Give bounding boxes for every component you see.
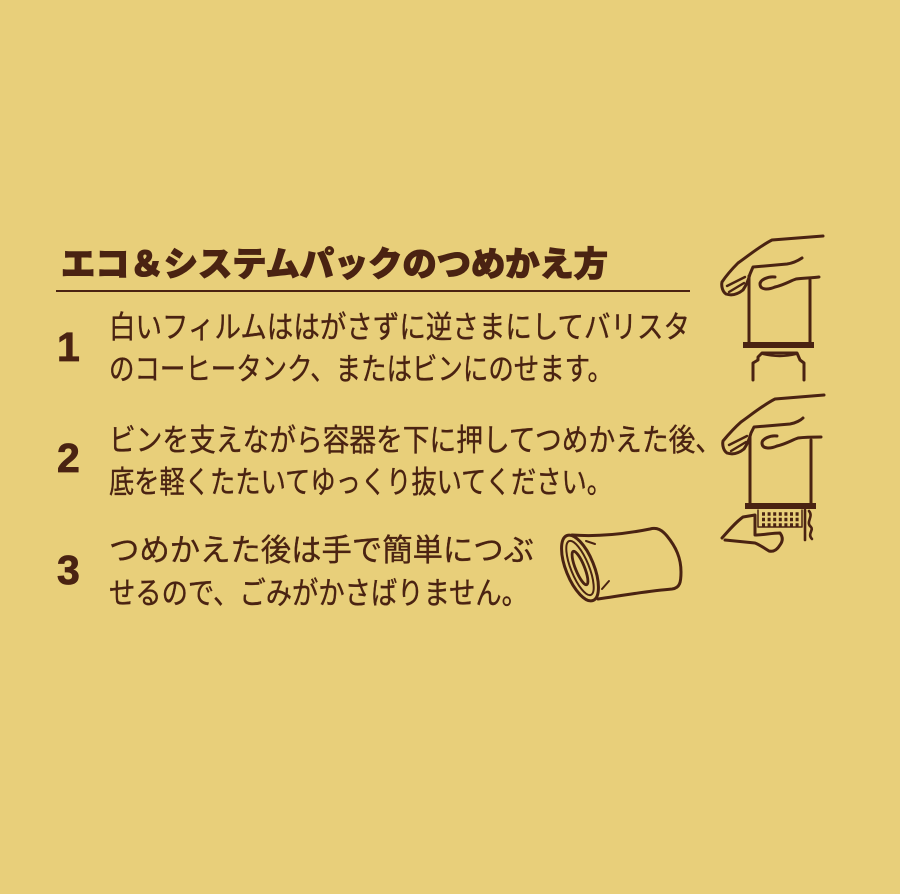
step 2 number: 2	[57, 435, 80, 481]
step 3 text: つめかえた後は手で簡単につぶ	[109, 533, 534, 568]
icon: pressing pack down and tapping	[722, 395, 824, 551]
step 2 text	[109, 423, 722, 500]
step 2 text: ビンを支えながら容器を下に押してつめかえた後、	[109, 423, 722, 458]
step 1 text	[109, 310, 690, 387]
step 2	[57, 423, 722, 500]
step 1 text: 白いフィルムははがさずに逆さまにしてバリスタ	[109, 310, 690, 345]
step 3 number: 3	[57, 547, 80, 593]
icon: flattened empty pack	[554, 528, 681, 606]
step 1 text: のコーヒータンク、またはビンにのせます。	[109, 352, 613, 387]
title rule	[56, 290, 690, 292]
step 3	[57, 533, 534, 611]
title: エコ＆システムパックのつめかえ方	[61, 246, 608, 284]
step 1 number: 1	[57, 324, 80, 370]
step 3 text: せるので、ごみがかさばりません。	[109, 576, 528, 611]
step 2 text: 底を軽くたたいてゆっくり抜いてください。	[109, 465, 612, 500]
icon: hand placing pack on jar	[722, 236, 823, 380]
step 1	[57, 310, 690, 387]
step 3 text	[109, 533, 534, 611]
